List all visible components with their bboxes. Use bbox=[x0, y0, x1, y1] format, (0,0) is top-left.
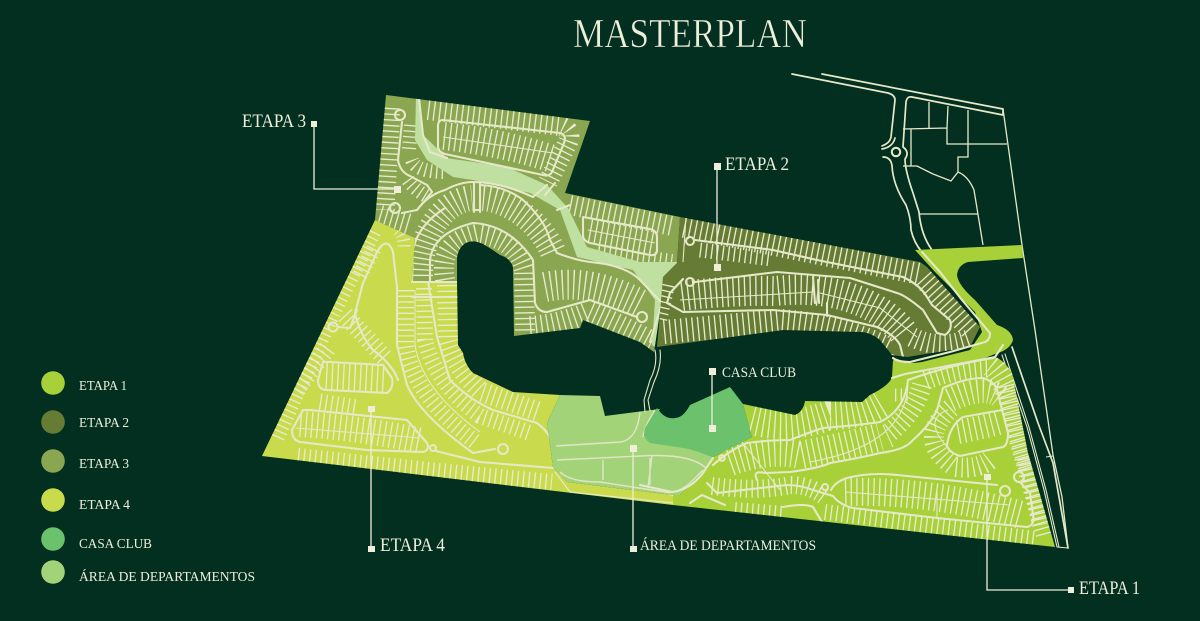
callout: casa club bbox=[709, 365, 796, 432]
legend item: area de departamentos bbox=[41, 560, 255, 585]
roads bbox=[390, 98, 662, 342]
roads bbox=[667, 217, 951, 362]
legend item: etapa 1: ETAPA 1 bbox=[79, 379, 127, 394]
legend item: etapa 2 bbox=[41, 410, 129, 434]
connector road on etapa 1 north bbox=[892, 252, 1003, 378]
legend item: etapa 3 bbox=[41, 449, 129, 473]
panel: casa club bbox=[644, 387, 752, 457]
callout: etapa 1: ETAPA 1 bbox=[1079, 578, 1140, 599]
legend item: etapa 2: ETAPA 2 bbox=[79, 416, 129, 431]
callout: etapa 2 bbox=[714, 154, 789, 271]
panel: etapa 1 bbox=[670, 355, 1060, 555]
callout: etapa 1 bbox=[984, 474, 1140, 599]
legend item: area de departamentos: ÁREA DE DEPARTAMENTOS bbox=[79, 568, 255, 585]
callout: etapa 4: ETAPA 4 bbox=[380, 535, 445, 556]
light green boulevard bbox=[415, 96, 680, 350]
callout: etapa 4 bbox=[368, 406, 445, 556]
callout: area de departamentos: ÁREA DE DEPARTAMENTOS bbox=[640, 537, 816, 554]
lot rows bbox=[660, 227, 972, 350]
panel: etapa 2 bbox=[657, 217, 980, 357]
legend item: casa club: CASA CLUB bbox=[79, 537, 152, 552]
north parcels and access roads bbox=[792, 74, 1068, 548]
legend item: casa club bbox=[41, 527, 152, 552]
panel: etapa 4 bbox=[255, 215, 680, 510]
legend item: etapa 4 bbox=[41, 488, 130, 513]
roads bbox=[690, 358, 1033, 527]
lot rows bbox=[712, 365, 1047, 539]
panel: etapa 3 bbox=[370, 90, 690, 360]
callout: etapa 2: ETAPA 2 bbox=[725, 154, 789, 175]
legend bbox=[41, 371, 255, 585]
east parallel roads bbox=[1002, 347, 1068, 548]
callout: area de departamentos bbox=[630, 445, 816, 554]
title: MASTERPLAN bbox=[573, 10, 807, 56]
legend item: etapa 1 bbox=[41, 371, 127, 395]
south boulevard between etapas bbox=[640, 458, 713, 492]
lot rows bbox=[274, 230, 552, 482]
roads bbox=[292, 244, 673, 503]
panel: area de departamentos bbox=[547, 395, 713, 495]
callout: etapa 3: ETAPA 3 bbox=[242, 111, 306, 132]
callout: etapa 3 bbox=[242, 111, 401, 193]
panel: etapa 1 north connector bbox=[892, 245, 1023, 378]
lake causeway bbox=[644, 350, 660, 412]
callout: casa club: CASA CLUB bbox=[722, 365, 796, 381]
legend item: etapa 3: ETAPA 3 bbox=[79, 457, 129, 472]
lot rows bbox=[380, 108, 672, 342]
legend item: etapa 4: ETAPA 4 bbox=[79, 498, 130, 513]
